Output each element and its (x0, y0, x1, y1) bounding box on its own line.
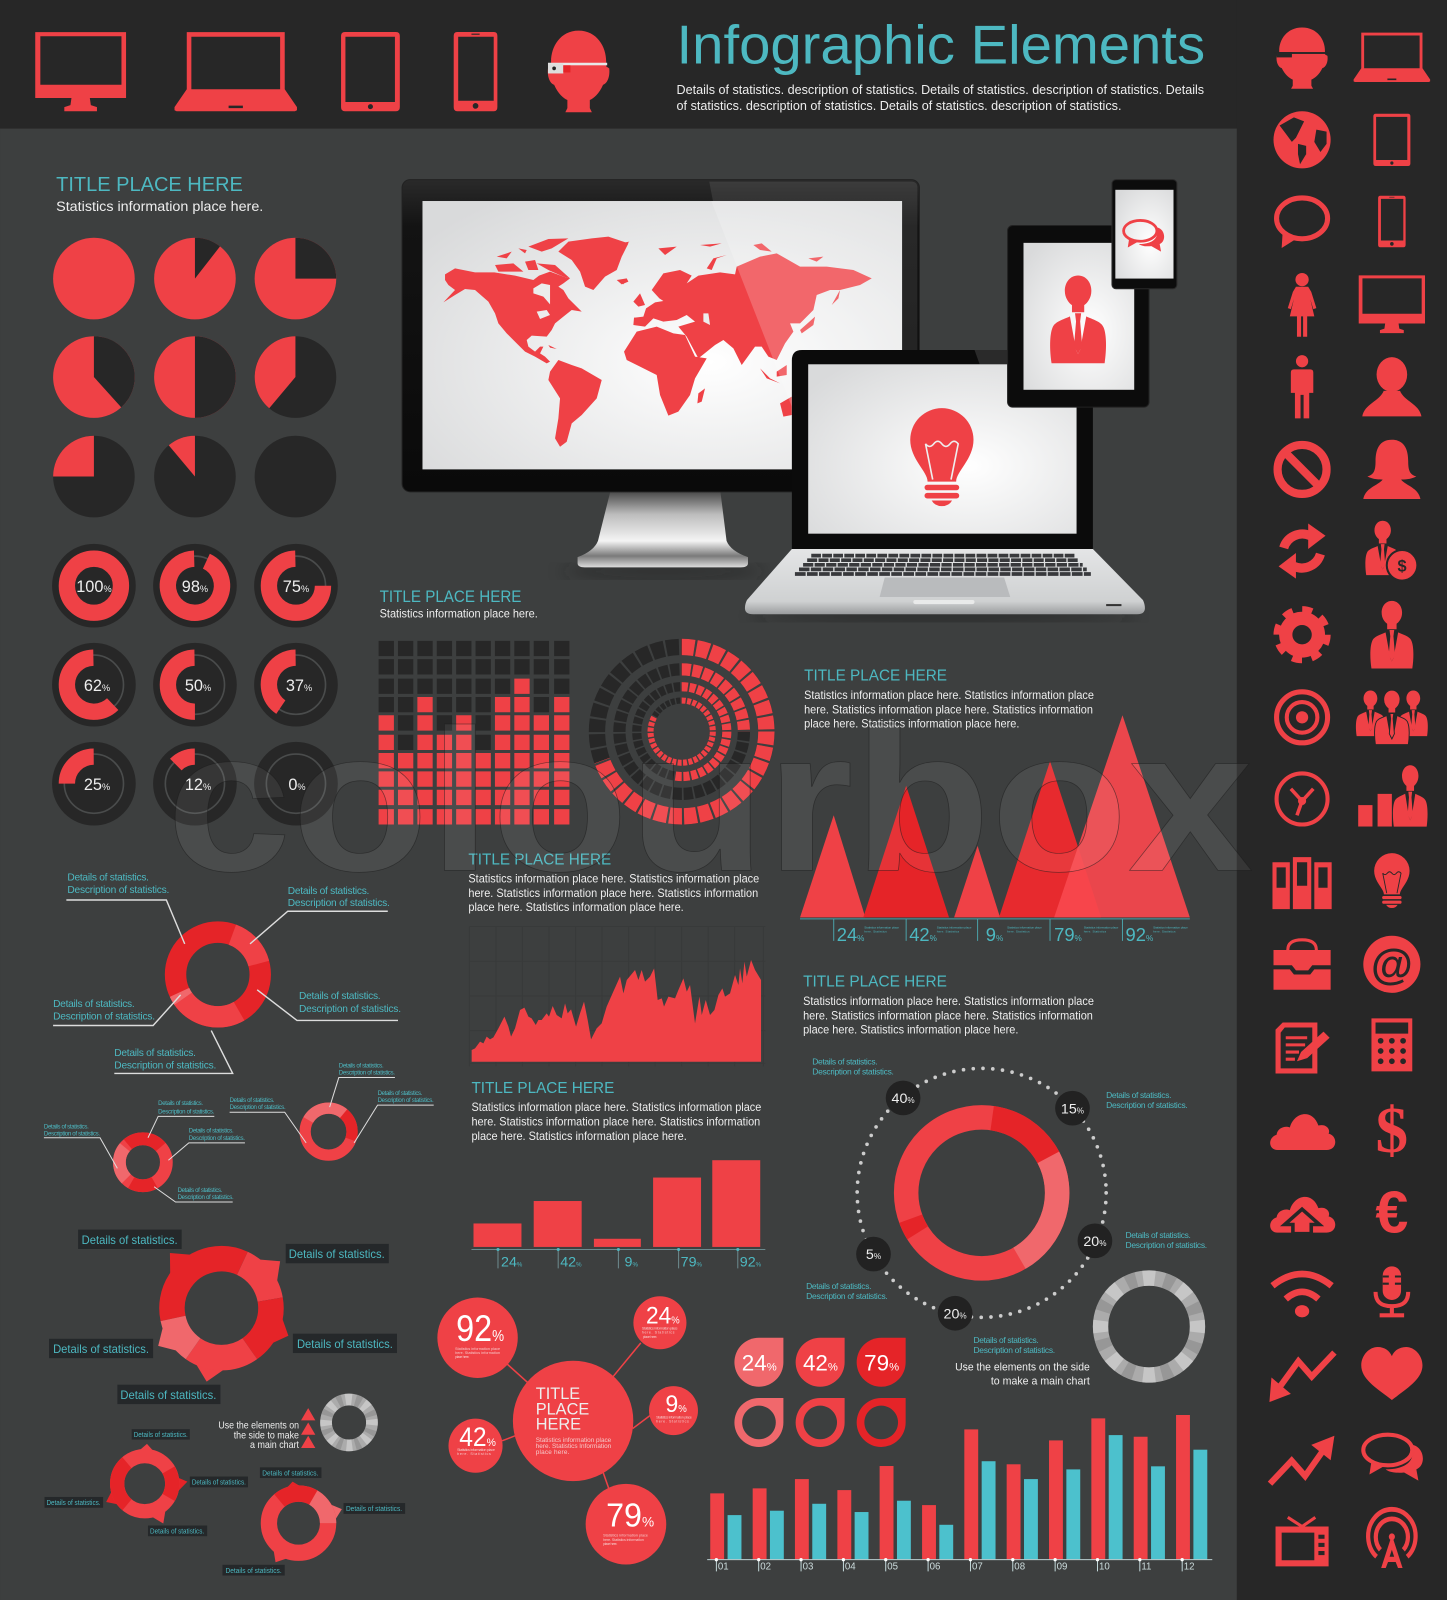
bubble text: place here. (536, 1449, 570, 1456)
grouped bar chart: 12 (1184, 1561, 1194, 1572)
icon: globe (1274, 111, 1331, 168)
header band (0, 0, 1447, 129)
grouped bar chart: 02 (760, 1561, 771, 1572)
shadows (561, 564, 765, 579)
gauge 37 (254, 643, 338, 727)
note with triangles and gray ring: a main chart (250, 1440, 299, 1451)
icon: at sign (1363, 936, 1420, 993)
axis and labels: 42% (909, 924, 937, 945)
grouped bar chart: 03 (803, 1561, 813, 1572)
bubble small text: here. Statistics (656, 1419, 689, 1423)
callouts: Details of statistics. (806, 1281, 871, 1291)
triangle chart (800, 715, 1190, 945)
section heading: equalizer: TITLE PLACE HERE (380, 588, 522, 606)
axis and labels: 9% (986, 924, 1003, 945)
labels (45, 1429, 248, 1536)
gauge 98: 98% (182, 578, 208, 596)
gauge 98 (153, 544, 237, 628)
icon: gear (1277, 609, 1328, 660)
laptop base shadow (750, 611, 1138, 621)
icon: briefcase (1274, 940, 1331, 990)
icon: trend down (1269, 1353, 1334, 1402)
gauge 75 (254, 544, 338, 628)
icon: person bust (1362, 357, 1421, 416)
icon: bulb (1374, 853, 1410, 908)
icon: businessman with dollar: $ (1398, 557, 1407, 575)
gauge 50: 50% (185, 677, 211, 695)
small callout donut right (230, 1062, 434, 1165)
main donut with dotted ring (806, 1056, 1210, 1388)
trackpad (880, 578, 1010, 597)
gauge 50 (153, 643, 237, 727)
callout donut large: Description of statistics. (299, 1004, 401, 1015)
main title: Infographic Elements (677, 13, 1205, 75)
bubble values: 79% (606, 1498, 654, 1535)
axis and labels: here. Statistics (1153, 930, 1176, 934)
bubble small text: place here. (455, 1355, 469, 1359)
small callout donut right: Description of statistics. (378, 1097, 434, 1104)
gauge 12: 12% (185, 776, 211, 794)
callout donut large: Description of statistics. (288, 898, 390, 909)
right icon column (1269, 28, 1430, 1568)
section heading: triangles: Statistics information place here. Statistics information place (804, 688, 1094, 702)
icon: speech bubble (1277, 198, 1328, 248)
icon: clock dial (1277, 773, 1328, 824)
percentage badges: 5% (866, 1247, 881, 1263)
callouts: Description of statistics. (1126, 1240, 1207, 1250)
labels: Details of statistics. (289, 1247, 385, 1261)
labels (222, 1467, 405, 1576)
gauge 0 (254, 742, 338, 826)
icon: businessman (1370, 601, 1413, 668)
icon: tablet (1373, 114, 1410, 166)
icon: businessman with dollar (1365, 521, 1417, 581)
teardrop badges: 24% (742, 1350, 777, 1375)
gauge 25 (52, 742, 136, 826)
axis and labels: Statistics information place (1084, 926, 1119, 930)
bubble values: 24% (646, 1302, 680, 1329)
icon: head with smart glasses (548, 31, 609, 112)
axis and labels: Statistics information place (937, 926, 972, 930)
icon: glass head (1275, 28, 1328, 89)
icon: folders (1272, 857, 1332, 909)
icon: businessman (1050, 276, 1106, 363)
icon: trend up (1270, 1436, 1334, 1484)
icon: woman bust (1363, 440, 1420, 499)
icon: target (1277, 692, 1328, 743)
callouts: Details of statistics. (1106, 1090, 1171, 1100)
section heading: area chart: Statistics information place here. Statistics information place (468, 872, 759, 886)
small callout donut left: Description of statistics. (158, 1108, 215, 1115)
spiked donut mini B (222, 1467, 405, 1576)
teardrop badges (734, 1338, 906, 1387)
bubble title: PLACE (536, 1400, 589, 1418)
pie 12 (154, 436, 236, 517)
section heading: main donut (803, 974, 1094, 1037)
section heading: equalizer (380, 588, 538, 620)
ring gauge grid (52, 544, 338, 826)
labels (49, 1230, 397, 1404)
grouped bar chart: 07 (972, 1561, 983, 1572)
bubble title: HERE (536, 1416, 581, 1434)
phone (1112, 180, 1177, 289)
gauge 37: 37% (286, 677, 312, 695)
callouts: Description of statistics. (1106, 1100, 1188, 1110)
note: Use the elements on the side (955, 1361, 1090, 1373)
laptop (745, 350, 1145, 614)
bubble small text: Statistics information place (457, 1448, 495, 1452)
icon: phone (454, 32, 497, 111)
tablet (1008, 226, 1149, 407)
bubble small text: here. Statistics information (603, 1538, 644, 1542)
axis and labels: here. Statistics (1084, 930, 1107, 934)
area chart (469, 927, 765, 1066)
gauge 25: 25% (84, 776, 110, 794)
section heading: area chart: here. Statistics information place here. Statistics information (468, 886, 758, 900)
section heading: triangles (804, 668, 1094, 731)
small callout donut right: Details of statistics. (378, 1090, 423, 1097)
percentage bar chart: 92% (740, 1254, 762, 1270)
grouped bar chart: 09 (1057, 1561, 1067, 1572)
small callout donut left: Description of statistics. (178, 1194, 234, 1201)
header description: Details of statistics. description of statistics. Details of statistics. description of statistics. Details (677, 82, 1204, 97)
small callout donut right: Details of statistics. (230, 1097, 275, 1104)
axis and labels: Statistics information place (1153, 926, 1188, 930)
small callout donut left: Details of statistics. (178, 1187, 223, 1194)
section heading: area chart: TITLE PLACE HERE (468, 851, 611, 868)
labels: Details of statistics. (262, 1470, 318, 1478)
icon: phone (1378, 196, 1406, 247)
grouped bar chart: 06 (930, 1561, 940, 1572)
callout donut large: Details of statistics. (67, 873, 149, 884)
icon: note with pen (1276, 1022, 1330, 1073)
section heading: pies: Statistics information place here. (56, 199, 263, 215)
callout donut large: Details of statistics. (53, 999, 135, 1010)
callout donut large: Details of statistics. (114, 1048, 196, 1059)
bubble small text: place here. (643, 1335, 657, 1339)
labels: Details of statistics. (53, 1342, 149, 1356)
callouts: Details of statistics. (812, 1056, 878, 1066)
icon: laptop (175, 32, 297, 111)
watermark: colourbox (166, 687, 1253, 913)
pie 25 (53, 436, 135, 517)
percentage badges: 40% (892, 1091, 915, 1107)
axis and labels: 24% (837, 924, 864, 945)
icon: team (1356, 690, 1428, 745)
grouped bar chart: 08 (1014, 1561, 1025, 1572)
labels: Details of statistics. (192, 1479, 246, 1487)
icon: wifi (1272, 1274, 1332, 1317)
icon: tablet (341, 32, 400, 111)
icon: dollar: $ (1376, 1095, 1408, 1167)
grouped bar chart: 04 (845, 1561, 856, 1572)
section heading: pies (56, 174, 263, 215)
section heading: main donut: TITLE PLACE HERE (803, 974, 947, 991)
section heading: triangles: here. Statistics information place here. Statistics information (804, 702, 1093, 716)
bubble small text: here. Statistics information (455, 1351, 500, 1355)
spiked donut large (49, 1230, 397, 1404)
callout donut large: Details of statistics. (299, 991, 381, 1002)
screen glare (711, 201, 902, 469)
percentage badges (856, 1081, 1112, 1331)
icon: monitor (1359, 275, 1425, 333)
header description (677, 82, 1204, 113)
grouped bar chart (707, 1415, 1212, 1572)
percentage badges: 20% (1083, 1234, 1106, 1250)
small callout donut left: Description of statistics. (44, 1131, 100, 1138)
teardrop badges: 42% (803, 1350, 838, 1375)
grouped bar chart: 10 (1099, 1561, 1110, 1572)
labels: Details of statistics. (297, 1337, 393, 1351)
small callout donut left (44, 1100, 245, 1202)
small callout donut left: Details of statistics. (158, 1100, 203, 1107)
keyboard (795, 556, 1091, 574)
gauge 100 (52, 544, 136, 628)
callouts (806, 1056, 1207, 1355)
bubble diagram (437, 1296, 698, 1564)
small callout donut left: Description of statistics. (189, 1135, 245, 1142)
section heading: triangles: TITLE PLACE HERE (804, 668, 947, 685)
header device icons (35, 31, 609, 112)
section heading: bars: TITLE PLACE HERE (471, 1080, 614, 1097)
icon: euro: € (1375, 1179, 1408, 1246)
pie 75 (255, 238, 336, 319)
labels: Details of statistics. (134, 1431, 188, 1439)
bubble text: here. Statistics Information (536, 1443, 612, 1450)
small callout donut left: Details of statistics. (189, 1128, 234, 1135)
header description: of statistics. description of statistics. Details of statistics. description of statistics. (677, 98, 1121, 113)
bubble small text: Statistics information place (656, 1415, 692, 1419)
icon: upload cloud (1270, 1197, 1335, 1234)
section heading: area chart (468, 851, 759, 914)
icon: chat (1363, 1435, 1423, 1481)
percentage bar chart: 24% (501, 1254, 523, 1270)
note with triangles and gray ring (218, 1394, 378, 1451)
axis and labels: 92% (1126, 924, 1153, 945)
gauge 0: 0% (288, 776, 306, 794)
icon: refresh (1279, 523, 1326, 579)
percentage badges: 15% (1061, 1101, 1084, 1117)
gauge 75: 75% (283, 578, 309, 596)
pie 0 (255, 436, 336, 517)
spiked donut mini A (45, 1429, 248, 1536)
icon: at sign: @ (1371, 941, 1413, 989)
icon: laptop (1354, 33, 1430, 82)
grouped bar chart: 05 (887, 1561, 898, 1572)
labels: Details of statistics. (150, 1528, 204, 1536)
bubble small text: Statistics information place (603, 1534, 648, 1538)
monitor stand (578, 492, 748, 567)
pie 62 (53, 336, 135, 418)
world map: Americas (443, 237, 628, 447)
section heading: main donut: Statistics information place here. Statistics information place (803, 994, 1094, 1008)
axis and labels: Statistics information place (1007, 926, 1042, 930)
bubble title: TITLE (536, 1385, 580, 1403)
icon: lightbulb (910, 408, 974, 506)
callout donut large: Details of statistics. (288, 886, 369, 897)
bubble small text: Statistics information place (455, 1347, 500, 1351)
grouped bar chart: 01 (718, 1561, 729, 1572)
axis and labels (800, 918, 1190, 945)
bubble values: 9% (665, 1391, 687, 1418)
device scene (402, 180, 1177, 621)
callouts: Description of statistics. (974, 1345, 1055, 1355)
axis and labels: here. Statistics (1007, 930, 1030, 934)
axis and labels: Statistics information place (864, 926, 899, 930)
segmented radial chart (597, 647, 766, 816)
callouts: Description of statistics. (806, 1291, 888, 1301)
gauge 100: 100% (76, 578, 112, 596)
icon: woman (1288, 273, 1316, 337)
section heading: main donut: place here. Statistics information place here. (803, 1023, 1018, 1037)
small callout donut right: Description of statistics. (339, 1069, 395, 1076)
icon: cloud (1270, 1114, 1335, 1150)
icon: calculator (1371, 1018, 1412, 1071)
pie 37 (255, 336, 336, 418)
pie 100 (53, 238, 135, 319)
icon: radio tower (1368, 1509, 1416, 1568)
section heading: area chart: place here. Statistics information place here. (468, 900, 684, 914)
gray ring element (1088, 1265, 1210, 1388)
icon: monitor (35, 32, 126, 111)
section heading: triangles: place here. Statistics information place here. (804, 717, 1019, 731)
note: to make a main chart (991, 1376, 1091, 1388)
bubble text (536, 1437, 612, 1456)
bubble small text: here. Statistics (457, 1452, 491, 1456)
percentage bar chart: 9% (625, 1254, 638, 1270)
pie chart grid (53, 238, 336, 517)
small callout donut right: Details of statistics. (339, 1062, 384, 1069)
pie 88 (154, 238, 236, 319)
pie 50 (154, 336, 236, 418)
bubble values: 42% (459, 1422, 496, 1452)
labels: Details of statistics. (346, 1505, 402, 1513)
bubble title (536, 1385, 589, 1434)
icon: microphone (1376, 1266, 1408, 1317)
section heading: equalizer: Statistics information place here. (380, 607, 538, 620)
bubble small text: place here. (603, 1542, 617, 1546)
bubble values: 92% (456, 1308, 504, 1349)
grouped bar chart: 11 (1141, 1561, 1151, 1572)
icon: bars with man (1358, 765, 1428, 827)
bubble small text: Statistics information place (642, 1327, 678, 1331)
teardrop badges: 79% (864, 1350, 899, 1375)
icon: heart (1361, 1347, 1422, 1400)
callouts: Description of statistics. (812, 1066, 894, 1076)
axis and labels: here. Statistics (864, 930, 887, 934)
axis and labels: 79% (1054, 924, 1082, 945)
bubble small text (455, 1327, 692, 1546)
bubble text: Statistics information place (536, 1437, 612, 1444)
section heading: bars: here. Statistics information place here. Statistics information (471, 1115, 760, 1129)
gauge 62 (52, 643, 136, 727)
gauge 12 (153, 742, 237, 826)
callout donut large: Description of statistics. (53, 1011, 155, 1022)
axis and labels: here. Statistics (937, 930, 960, 934)
icon: no sign (1278, 445, 1327, 494)
labels: Details of statistics. (120, 1388, 216, 1402)
note with triangles and gray ring: the side to make (234, 1430, 299, 1441)
labels: Details of statistics. (82, 1233, 178, 1247)
bubble values (456, 1302, 687, 1535)
callouts: Details of statistics. (1126, 1230, 1191, 1240)
right icon column band (1237, 0, 1447, 1600)
monitor (402, 180, 919, 492)
icon: man (1291, 355, 1313, 418)
section heading: bars (471, 1080, 761, 1143)
callout donut large (53, 873, 401, 1073)
equalizer grid chart (379, 641, 569, 824)
section heading: main donut: here. Statistics information place here. Statistics information (803, 1008, 1093, 1022)
callouts: Details of statistics. (974, 1335, 1039, 1345)
percentage bar chart: 42% (560, 1254, 582, 1270)
note with triangles and gray ring: Use the elements on (218, 1421, 299, 1432)
teardrop rings (734, 1398, 906, 1447)
small callout donut right: Description of statistics. (230, 1104, 286, 1111)
labels: Details of statistics. (46, 1499, 101, 1507)
section heading: pies: TITLE PLACE HERE (56, 174, 243, 196)
icon: chat bubbles (1124, 220, 1164, 252)
percentage bar chart: 79% (681, 1254, 703, 1270)
callout donut large: Description of statistics. (114, 1060, 216, 1071)
callout donut large: Description of statistics. (67, 885, 169, 896)
percentage badges: 20% (944, 1306, 967, 1322)
world map: Eurasia, Africa, Australia (620, 242, 872, 417)
section heading: bars: Statistics information place here. Statistics information place (471, 1100, 761, 1114)
labels: Details of statistics. (226, 1567, 282, 1575)
percentage bar chart (471, 1160, 765, 1270)
small callout donut left: Details of statistics. (44, 1124, 89, 1131)
note (955, 1361, 1091, 1388)
bubble small text: here. Statistics (642, 1331, 675, 1335)
gauge 62: 62% (84, 677, 110, 695)
icon: TV (1276, 1517, 1329, 1566)
section heading: bars: place here. Statistics information place here. (471, 1129, 687, 1143)
